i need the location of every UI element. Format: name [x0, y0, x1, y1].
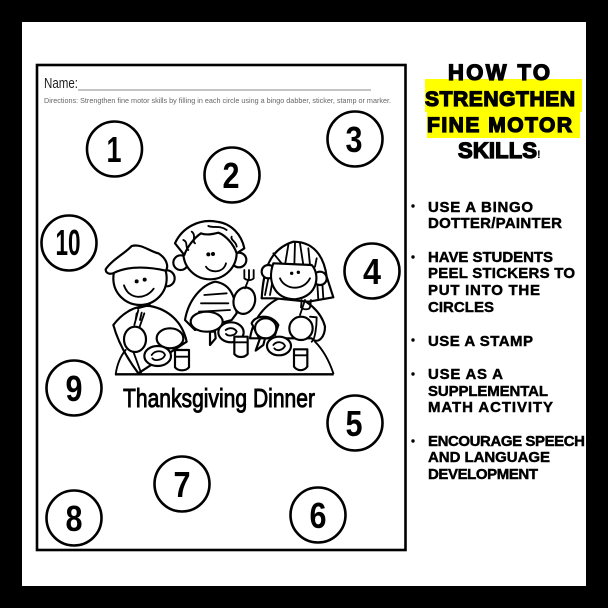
heading: HOW TO [448, 60, 550, 85]
heading: ! [537, 149, 541, 161]
illustration: three children eating at a table [106, 221, 334, 374]
tip: math activity [411, 366, 553, 416]
tip: speech and language [411, 433, 585, 483]
number circle 2: 2 [222, 155, 240, 196]
worksheet title: Thanksgiving Dinner [123, 383, 315, 413]
heading: FINE MOTOR [427, 114, 572, 137]
number circle 1: 1 [106, 129, 122, 170]
number circle 10 [42, 216, 96, 270]
number circle 9 [46, 360, 102, 416]
heading: SKILLS [458, 138, 537, 163]
child in the middle [173, 221, 258, 345]
tip: speech and language: DEVELOPMENT [428, 466, 538, 483]
tip: bingo dotter [411, 199, 562, 232]
number circle 3: 3 [346, 119, 362, 160]
worksheet name field: Name: [44, 75, 78, 92]
number circle 10: 10 [56, 222, 80, 263]
tip: bingo dotter: DOTTER/PAINTER [428, 215, 562, 232]
number circle 2 [204, 148, 260, 202]
number circle 7 [154, 456, 210, 512]
tip: stickers [411, 249, 575, 316]
tip list [411, 199, 585, 483]
heading [425, 60, 582, 163]
tip: math activity: USE AS A [428, 366, 503, 383]
tip: stickers: PEEL STICKERS TO [428, 265, 575, 282]
number circle 6: 6 [310, 495, 326, 536]
number circle 7: 7 [174, 464, 190, 505]
number circle 4 [344, 244, 400, 298]
number circle 3 [328, 112, 382, 166]
tip: stickers: HAVE STUDENTS [428, 249, 553, 266]
number circle 8: 8 [66, 498, 82, 539]
tip: stamp: USE A STAMP [428, 333, 533, 350]
tip: math activity: MATH ACTIVITY [428, 399, 553, 416]
tip: bingo dotter: USE A BINGO [428, 199, 533, 216]
tip: stickers: CIRCLES [428, 299, 494, 316]
number circle 6 [290, 488, 346, 542]
child on the right [250, 242, 333, 351]
panel: worksheet [37, 65, 406, 550]
worksheet directions: Directions: Strengthen fine motor skills by filling in each circle using a bingo dabber, sticker, stamp or marker. [44, 96, 391, 105]
heading highlight [425, 79, 582, 138]
tip: stickers: PUT INTO THE [428, 282, 540, 299]
number circle 8 [46, 490, 102, 546]
child on the left [106, 245, 187, 373]
tip: speech and language: ENCOURAGE SPEECH [428, 433, 585, 450]
number circle 4: 4 [363, 251, 381, 292]
number circle 1 [87, 122, 142, 176]
number circle 5: 5 [346, 403, 362, 444]
number circle 9: 9 [66, 368, 82, 409]
number circle 5 [328, 396, 382, 450]
dinner table with plates and glasses [115, 322, 334, 374]
heading: STRENGTHEN [425, 88, 575, 111]
tip: speech and language: AND LANGUAGE [428, 449, 550, 466]
tip: math activity: SUPPLEMENTAL [428, 383, 548, 400]
